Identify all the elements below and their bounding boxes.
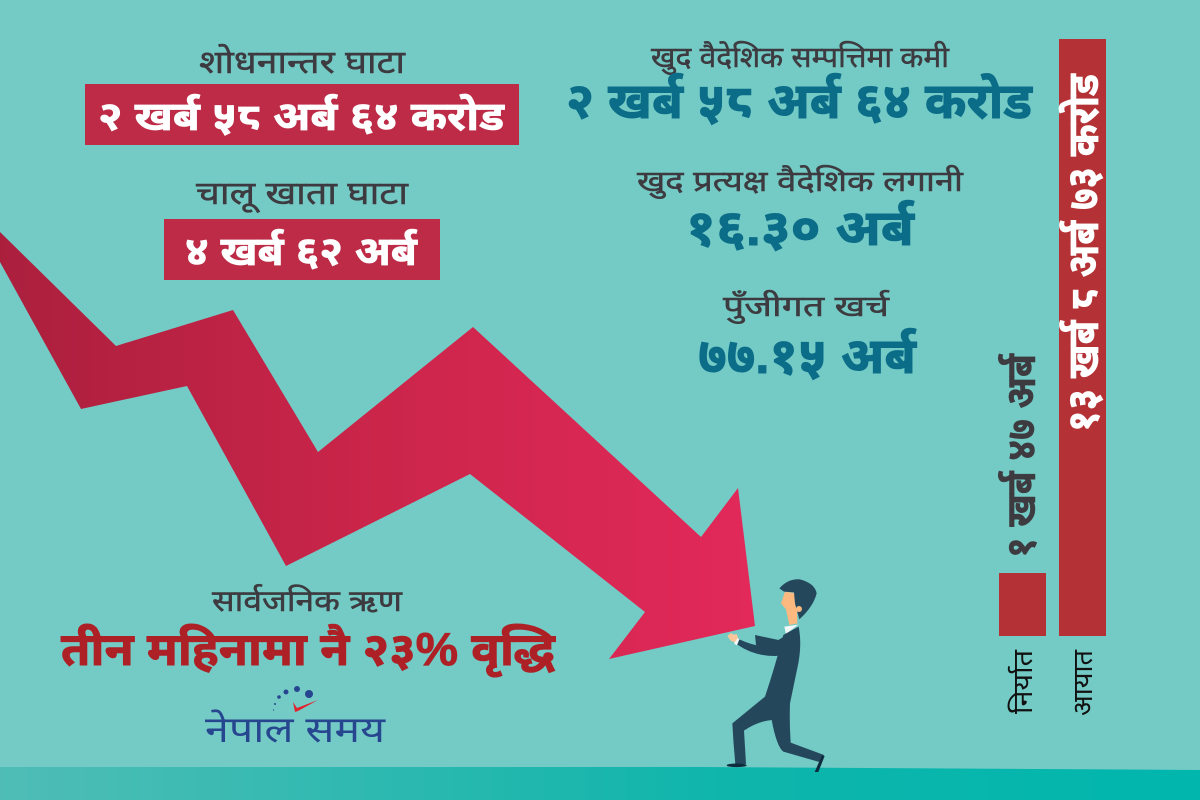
import label: आयात <box>1068 649 1098 716</box>
falling red arrow <box>0 232 755 659</box>
logo clock hand <box>293 700 318 712</box>
value: net foreign direct investment: १६.३० अर्ब <box>686 200 915 256</box>
import bar <box>1059 39 1106 636</box>
value: public debt growth: तीन महिनामा नै २३% वृद्धि <box>61 623 556 678</box>
panel: balance of payments deficit <box>85 44 519 145</box>
value box: balance of payments deficit <box>85 84 519 145</box>
ear <box>796 606 802 612</box>
suit body and legs <box>732 627 824 764</box>
value: net foreign assets decrease: २ खर्ब ५८ अर्ब ६४ करोड <box>566 73 1033 129</box>
hand <box>727 633 739 643</box>
value box: current account deficit <box>164 219 440 280</box>
shoes <box>727 763 747 767</box>
export label: निर्यात <box>1007 649 1038 714</box>
export value: १ खर्ब ४७ अर्ब <box>998 353 1044 558</box>
import value: १३ खर्ब ८ अर्ब ७३ करोड <box>1059 73 1108 432</box>
heading: balance of payments deficit: शोधनान्तर घाटा <box>199 44 406 80</box>
ground strip <box>0 767 1200 800</box>
logo: Nepal Samay <box>205 686 386 750</box>
hair <box>779 579 817 619</box>
logo clock dots <box>273 686 313 711</box>
panel: net foreign assets decrease <box>566 41 1033 129</box>
cuff <box>734 638 740 645</box>
export bar <box>999 573 1046 636</box>
heading: current account deficit: चालू खाता घाटा <box>196 175 409 213</box>
icon: businessman pushing arrow <box>727 579 825 772</box>
value: capital expenditure: ७७.१५ अर्ब <box>698 328 917 384</box>
panel: net foreign direct investment <box>637 165 964 256</box>
heading: net foreign assets decrease: खुद वैदेशिक सम्पत्तिमा कमी <box>651 41 949 75</box>
collar <box>784 625 798 634</box>
panel: capital expenditure <box>698 290 917 384</box>
heading: net foreign direct investment: खुद प्रत्यक्ष वैदेशिक लगानी <box>637 165 964 199</box>
far arm <box>755 635 783 657</box>
panel: current account deficit <box>164 175 440 280</box>
panel: public debt <box>61 584 556 678</box>
near arm <box>737 635 787 656</box>
heading: capital expenditure: पुँजीगत खर्च <box>723 290 890 324</box>
heading: public debt: सार्वजनिक ऋण <box>212 584 403 618</box>
value box: balance of payments deficit: २ खर्ब ५८ अर्ब ६४ करोड <box>98 94 505 139</box>
bar chart: exports and imports <box>998 39 1108 716</box>
rear shoe <box>815 755 825 772</box>
value box: current account deficit: ४ खर्ब ६२ अर्ब <box>185 229 418 274</box>
logo wordmark: नेपाल समय <box>205 709 386 750</box>
neck and face <box>781 592 797 625</box>
